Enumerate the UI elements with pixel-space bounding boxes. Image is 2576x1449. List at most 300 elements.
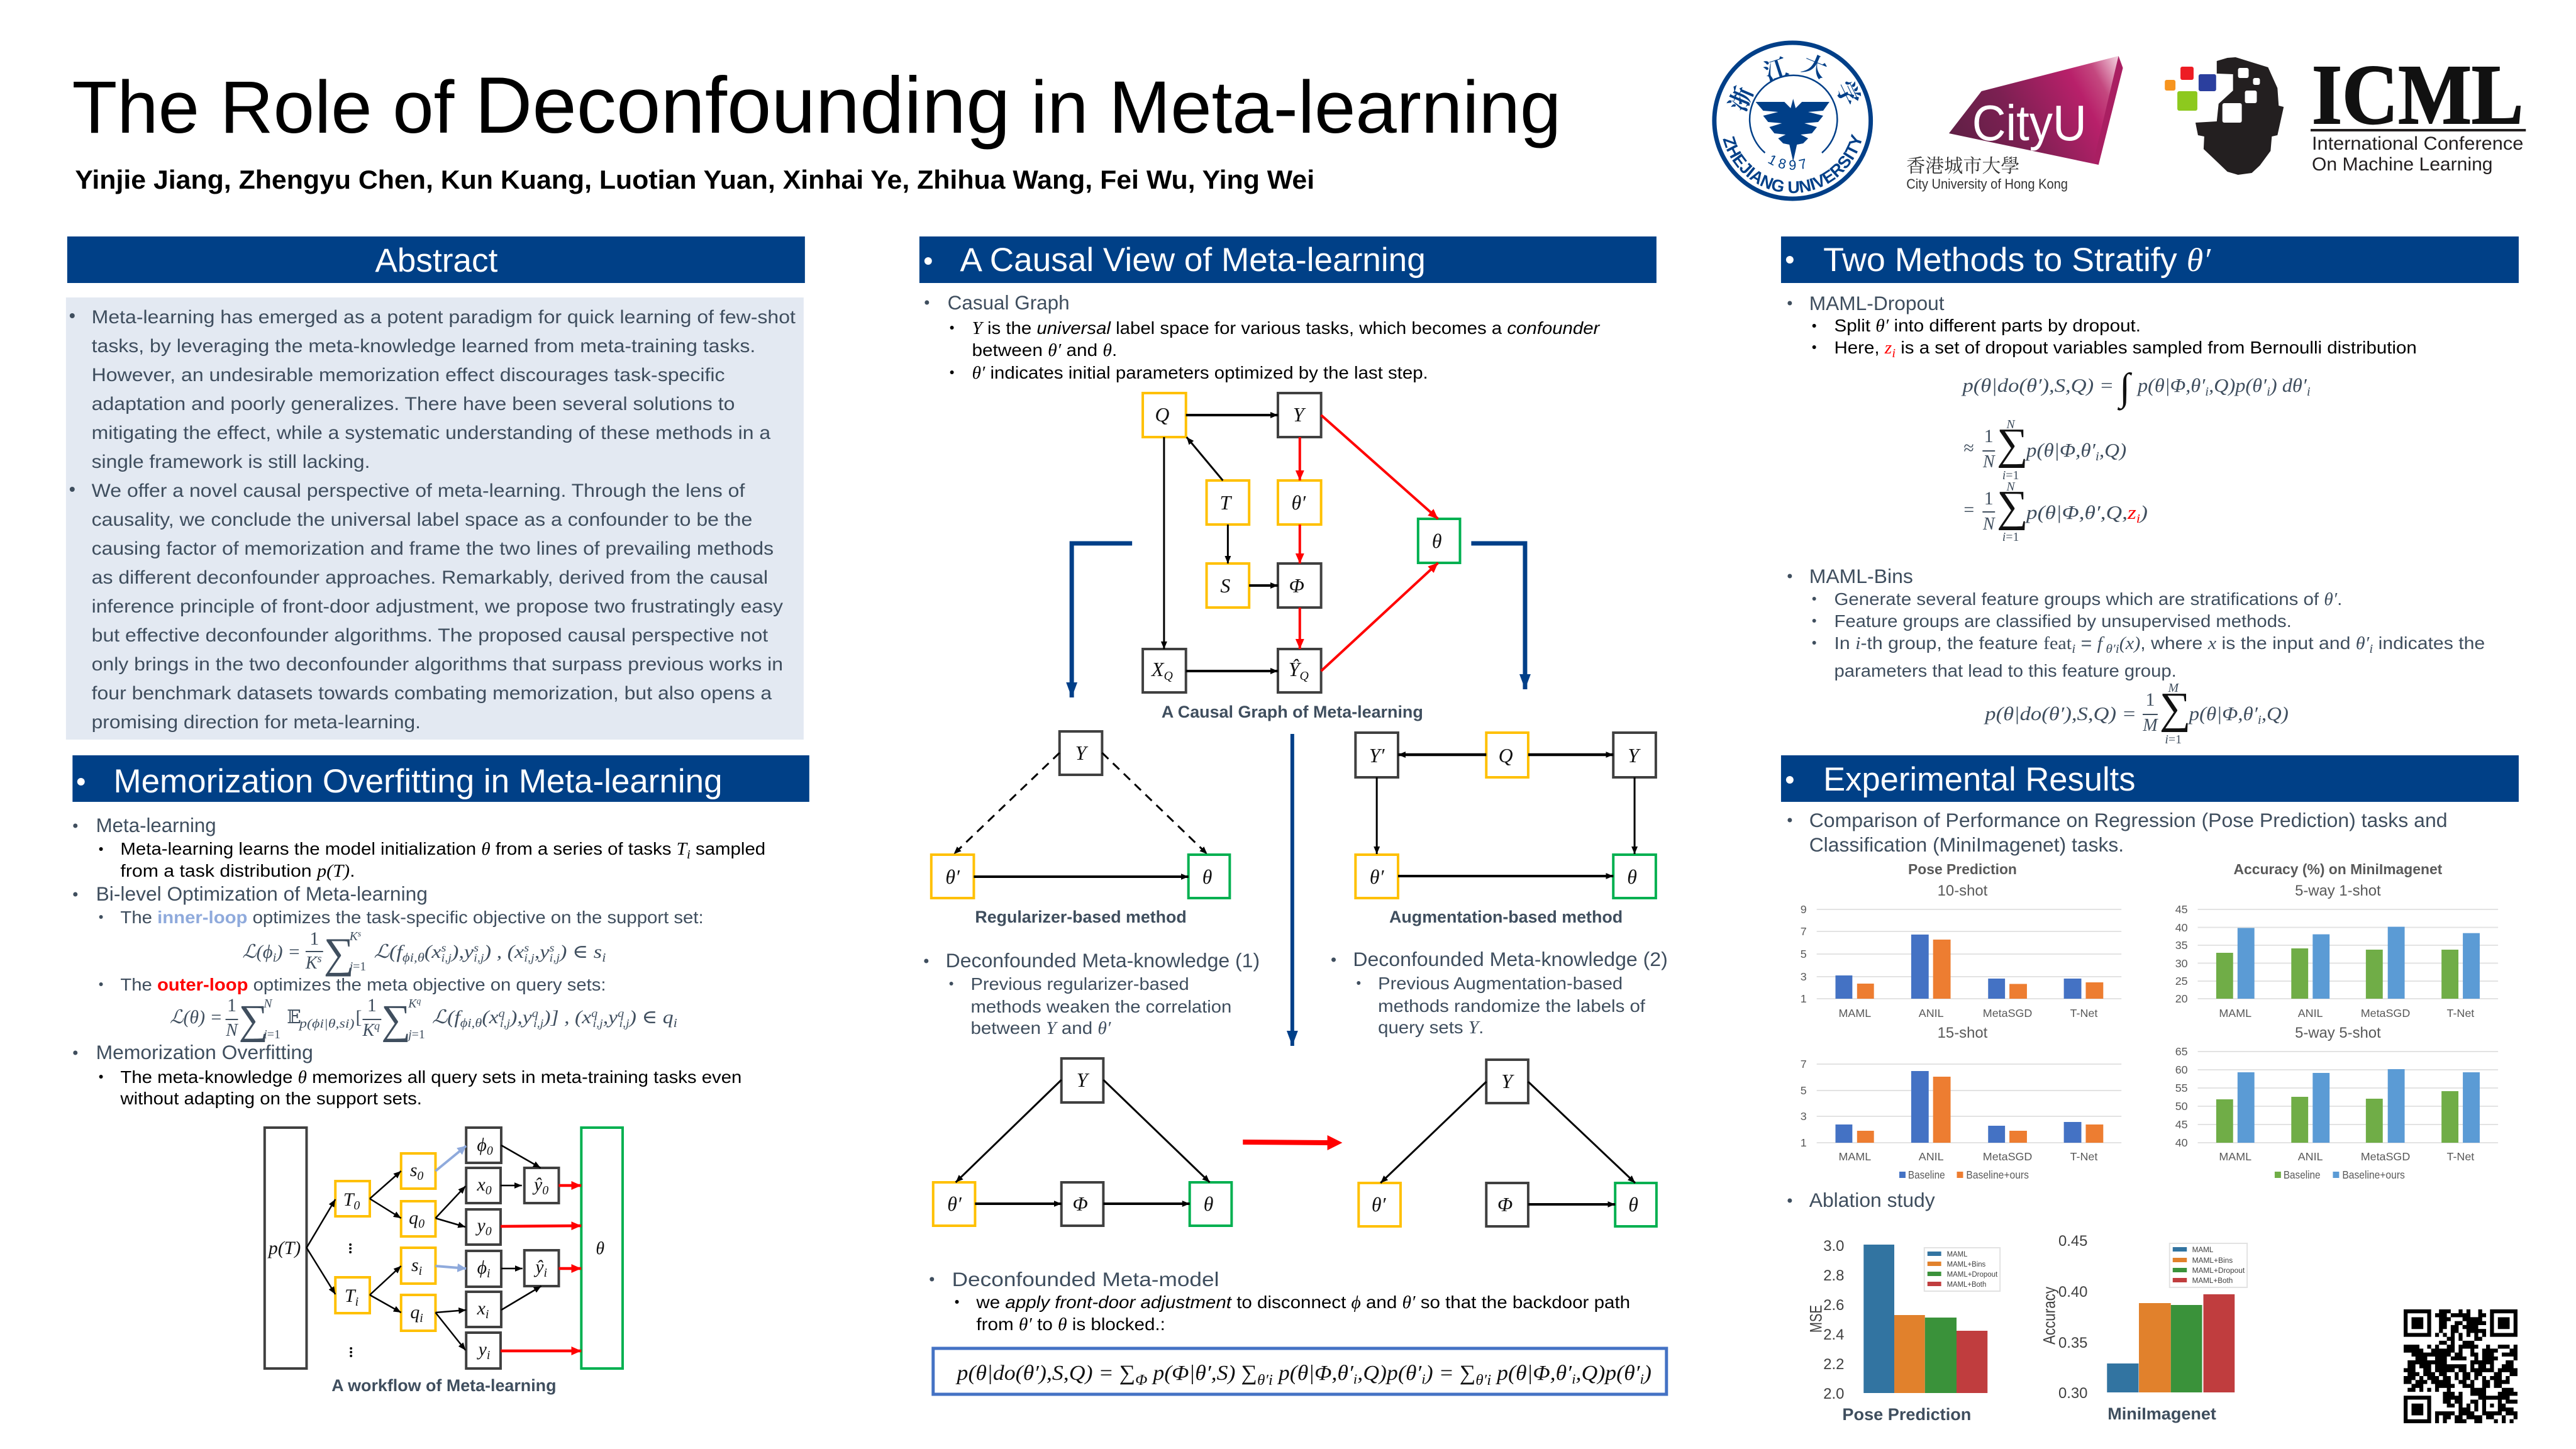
text block: MAML-Bins: = xyxy=(2075,633,2097,653)
panel: Abstract text: causing factor of memorization and frame the two lines of prevailing methods xyxy=(92,538,774,559)
box: x0: 0 xyxy=(486,1184,492,1197)
formula: inner-loop objective: i,j xyxy=(474,952,484,964)
header: poster title and authors xyxy=(72,60,1561,194)
bar chart: Pose 15-shot: MetaSGD xyxy=(1983,1150,2032,1163)
formula: inner-loop objective: s xyxy=(441,941,446,954)
text block: comparison xyxy=(1787,809,2448,856)
arrow: red transition xyxy=(1243,1135,1342,1150)
panel: Abstract text: promising direction for meta-learning. xyxy=(92,712,421,733)
text block: memorization bullets xyxy=(73,814,765,1108)
formula: outer-loop objective: N xyxy=(225,1021,238,1040)
box: si: s xyxy=(411,1255,419,1275)
formula: inner-loop objective: ,y xyxy=(535,941,550,962)
diagram: regularizer-based method xyxy=(931,731,1230,898)
bar chart: Pose 15-shot: 7 xyxy=(1801,1058,1807,1070)
formula: dropout integral: ) dθ′ xyxy=(2269,374,2307,396)
text block: deconfounded meta-knowledge 2: Deconfounded Meta-knowledge (2) xyxy=(1353,948,1668,970)
box: q0: q xyxy=(409,1208,418,1228)
formula box: front-door adjustment: Φ xyxy=(1135,1372,1147,1389)
arrows: inner-loop adaptation xyxy=(435,1146,466,1269)
bar chart: MiniImagenet 5-way 5-shot: 40 xyxy=(2175,1136,2188,1149)
caption: regularizer: Regularizer-based method xyxy=(975,908,1187,926)
formula: outer-loop objective: K xyxy=(408,997,416,1011)
formula: dropout sample: i xyxy=(2136,512,2140,526)
node: Y: Y xyxy=(1293,404,1306,426)
bar chart: Pose 10-shot: 3 xyxy=(1801,970,1807,983)
formula: dropout integral: i xyxy=(2205,385,2209,399)
icon: ellipsis dots xyxy=(349,1243,352,1357)
legend: ablation MSE: MAML+Bins xyxy=(1947,1260,1985,1269)
legend: ablation accuracy: MAML xyxy=(2192,1245,2214,1254)
legend: ablation MSE xyxy=(1924,1248,2000,1291)
formula: bins: M xyxy=(2167,681,2179,695)
text block: MAML-Bins: f xyxy=(2097,634,2105,653)
diagram: augmentation-based method: Y′ xyxy=(1369,745,1385,767)
box: xi: i xyxy=(486,1307,489,1321)
bar chart: MiniImagenet 5-way 1-shot: 45 xyxy=(2175,903,2188,916)
formula: bins: i xyxy=(2258,713,2262,727)
bar chart: MiniImagenet 5-way 5-shot: MAML xyxy=(2219,1150,2251,1163)
arrows: black causal edges xyxy=(1164,415,1278,671)
box: p(T) xyxy=(265,1128,306,1368)
formula: outer-loop objective: (x xyxy=(482,1007,499,1028)
bar chart: MiniImagenet 5-way 5-shot: ANIL xyxy=(2298,1150,2323,1163)
diagram: front-door before: θ′ xyxy=(947,1193,962,1215)
formula box: front-door adjustment: p(θ|Φ,θ′ xyxy=(1273,1362,1353,1385)
column: left xyxy=(66,236,809,1108)
logo: ICML: On Machine Learning xyxy=(2312,154,2493,175)
logo: CityU: 香港城市大學 xyxy=(1906,151,2019,178)
bar chart: MiniImagenet 5-way 1-shot: 20 xyxy=(2175,992,2188,1005)
caption: causal graph: A Causal Graph of Meta-learning xyxy=(1162,702,1423,721)
bar chart: Pose 15-shot: T-Net xyxy=(2070,1150,2097,1163)
text block: deconfounded meta-knowledge 1: between Y and θ′ xyxy=(970,1018,1111,1038)
text block: MAML-Bins: Feature groups are classified by unsupervised methods. xyxy=(1835,611,2292,631)
node: theta prime: θ′ xyxy=(1291,492,1306,514)
formula: dropout sample: p(θ|Φ,θ′,Q, z xyxy=(2026,501,2135,523)
text block: deconfounded meta-knowledge 1: Previous regularizer-based xyxy=(970,974,1189,994)
formula: dropout sample: = xyxy=(1963,499,1974,520)
panel: Causal View heading xyxy=(919,236,1657,283)
formula box: front-door adjustment: ) = ∑ xyxy=(1424,1362,1475,1385)
box: T0 xyxy=(335,1181,370,1216)
text block: MAML-Bins: , where x is the input and θ′ xyxy=(2140,633,2368,653)
text block: memorization bullets: The inner-loop optimizes the task-specific objective on the support set: xyxy=(120,908,704,927)
diagram: front-door after: θ xyxy=(1628,1194,1638,1216)
bar chart: MiniImagenet 5-way 1-shot: 35 xyxy=(2175,939,2188,952)
arrows: outer-loop to theta xyxy=(501,1185,581,1351)
text block: memorization bullets: Meta-learning xyxy=(96,814,216,836)
panel: Abstract text: but effective deconfounder algorithms. The proposed causal perspective not xyxy=(92,625,769,646)
node: Q: Q xyxy=(1155,404,1169,426)
formula: dropout approximation: ∑ xyxy=(1997,420,2028,469)
legend: accuracy charts: Baseline+ours xyxy=(2342,1169,2405,1181)
legend: ablation accuracy xyxy=(2170,1243,2247,1287)
bar chart: MiniImagenet 5-way 5-shot xyxy=(2175,1024,2498,1163)
bar chart: Pose 10-shot: MetaSGD xyxy=(1983,1007,2032,1019)
box: y0: 0 xyxy=(486,1224,492,1238)
formula: dropout sample: ∑ xyxy=(1997,482,2028,531)
bar chart: Pose 10-shot: 9 xyxy=(1801,903,1807,916)
panel: Abstract text: as different deconfounder approaches. Remarkably, derived from the causal xyxy=(92,567,768,588)
node: XQ: Q xyxy=(1163,669,1173,683)
logo: Zhejiang University seal: 浙 xyxy=(1719,80,1760,116)
box: Ti xyxy=(335,1277,370,1313)
formula: outer-loop objective: q xyxy=(499,1007,505,1019)
formula: bins: ∑ xyxy=(2160,684,2191,733)
text block: deconfounded meta-knowledge 2 xyxy=(1331,948,1668,1038)
arrow: blue elbow right xyxy=(1471,543,1525,689)
text block: casual graph bullets xyxy=(924,292,1601,383)
bar chart: MiniImagenet 5-way 5-shot: 55 xyxy=(2175,1082,2188,1094)
box: x0 xyxy=(466,1168,501,1203)
bar chart: Pose 10-shot: T-Net xyxy=(2070,1007,2097,1019)
diagram: augmentation-based method: Y xyxy=(1628,745,1641,767)
formula: outer-loop objective: K xyxy=(362,1021,374,1040)
formula: inner-loop objective: (x xyxy=(425,941,441,962)
formula: inner-loop objective: s xyxy=(524,941,529,954)
formula: dropout sample: 1 xyxy=(1984,488,1994,509)
box: phi0 xyxy=(466,1128,501,1163)
box: theta: θ xyxy=(596,1239,604,1258)
text block: casual graph bullets: Y is the universal label space for various tasks, which becomes a confounder xyxy=(972,318,1601,338)
bar chart: ablation accuracy: 0.45 xyxy=(2058,1233,2087,1250)
box: qi: q xyxy=(410,1302,419,1323)
formula: inner-loop objective: s xyxy=(474,941,479,954)
formula: outer-loop objective: i xyxy=(674,1016,677,1030)
legend: accuracy charts: Baseline xyxy=(2284,1169,2321,1181)
formula: outer-loop objective: [ xyxy=(356,1007,362,1028)
formula box: front-door adjustment: i xyxy=(1640,1371,1644,1387)
box: xi: x xyxy=(477,1298,486,1319)
panel: Abstract heading: Abstract xyxy=(375,242,498,279)
chart title: Accuracy on MiniImagenet: Accuracy (%) on MiniImagenet xyxy=(2233,861,2443,877)
bar chart: Pose 10-shot: 10-shot xyxy=(1938,882,1988,899)
text block: deconfounded meta-knowledge 1: methods weaken the correlation xyxy=(970,997,1231,1016)
logo: Zhejiang University seal: 大 xyxy=(1798,44,1833,85)
text block: deconfounded meta-model: we apply front-door adjustment to disconnect ϕ and θ′ so that the backdoor path xyxy=(975,1292,1630,1313)
logo: Zhejiang University seal: 1 8 9 7 xyxy=(1768,155,1805,170)
formula box: front-door adjustment: p(θ|do(θ′),S,Q) = ∑ xyxy=(957,1362,1125,1385)
node: XQ xyxy=(1143,649,1186,692)
node: Phi xyxy=(1278,564,1321,608)
formula: dropout integral: p(θ|Φ,θ′ xyxy=(2138,374,2202,396)
formula: dropout integral: i xyxy=(2307,385,2311,399)
text block: deconfounded meta-model xyxy=(930,1269,1630,1335)
panel: Abstract text: inference principle of front-door adjustment, we propose two frustratingly easy xyxy=(92,596,783,617)
text block: memorization bullets: i xyxy=(687,848,691,862)
formula: inner-loop objective: ),y xyxy=(450,941,474,962)
legend: ablation MSE: MAML+Dropout xyxy=(1947,1270,1998,1279)
bar chart: ablation accuracy: Accuracy xyxy=(2040,1287,2059,1345)
text block: memorization bullets: The meta-knowledge θ memorizes all query sets in meta-training tasks even xyxy=(120,1067,741,1087)
box: q0: 0 xyxy=(418,1217,425,1231)
formula: bins: p(θ|Φ,θ′ xyxy=(2189,702,2253,724)
box: yi: y xyxy=(479,1339,487,1360)
authors: Yinjie Jiang, Zhengyu Chen, Kun Kuang, Luotian Yuan, Xinhai Ye, Zhihua Wang, Fei Wu, Ying Wei xyxy=(75,165,1314,194)
diagram: augmentation-based method: θ xyxy=(1627,866,1637,888)
node: S: S xyxy=(1220,575,1230,597)
bar chart: MiniImagenet 5-way 5-shot: T-Net xyxy=(2447,1150,2474,1163)
caption: ablation miniimagenet: MiniImagenet xyxy=(2107,1404,2216,1423)
caption: workflow: A workflow of Meta-learning xyxy=(331,1376,557,1395)
formula: dropout approximation: i=1 xyxy=(2002,469,2019,482)
legend: ablation accuracy: MAML+Dropout xyxy=(2192,1266,2245,1275)
bar chart: MiniImagenet 5-way 1-shot: 30 xyxy=(2175,957,2188,970)
formula: outer-loop objective: q xyxy=(374,1019,380,1032)
bar chart: ablation accuracy: 0.35 xyxy=(2058,1335,2087,1352)
panel: Abstract text: We offer a novel causal perspective of meta-learning. Through the lens of xyxy=(92,480,745,501)
panel: Memorization Overfitting heading xyxy=(72,755,809,802)
formula: outer-loop objective xyxy=(170,995,677,1043)
formula: dropout integral: ,Q)p(θ′ xyxy=(2209,374,2267,396)
diagram: front-door after: θ′ xyxy=(1372,1194,1386,1216)
bar chart: MiniImagenet 5-way 1-shot: ANIL xyxy=(2298,1007,2323,1019)
box: phii xyxy=(466,1251,501,1287)
bar chart: ablation MSE: 2.8 xyxy=(1823,1267,1844,1284)
bar chart: Pose 10-shot: MAML xyxy=(1838,1007,1871,1019)
text block: MAML-Bins: i xyxy=(2369,642,2373,656)
bar chart: MiniImagenet 5-way 1-shot: MAML xyxy=(2219,1007,2251,1019)
formula: outer-loop objective: ℒ(θ) = xyxy=(170,1007,223,1028)
node: T xyxy=(1207,480,1249,525)
column: right xyxy=(1781,236,2519,1424)
formula: inner-loop objective xyxy=(242,928,606,977)
legend: ablation MSE: MAML xyxy=(1947,1250,1968,1258)
formula: outer-loop objective: q xyxy=(591,1007,597,1019)
bar chart: Pose 10-shot: 7 xyxy=(1801,925,1807,938)
arrow: blue elbow left xyxy=(1072,543,1132,697)
panel: Abstract text: tasks, by leveraging the meta-knowledge learned from meta-training tasks. xyxy=(92,336,755,357)
box: x0: x xyxy=(477,1174,486,1195)
panel: Experimental Results heading xyxy=(1781,755,2519,802)
panel: Memorization Overfitting heading: Memorization Overfitting in Meta-learning xyxy=(113,763,723,800)
formula: dropout approximation: p(θ|Φ,θ′ xyxy=(2026,439,2090,461)
bar chart: Pose 10-shot: ANIL xyxy=(1919,1007,1944,1019)
panel: Abstract text: mitigating the effect, while a systematic understanding of these methods in a xyxy=(92,423,771,443)
formula: bins: p(θ|do(θ′),S,Q) = xyxy=(1984,702,2136,724)
diagram: causal graph xyxy=(1143,393,1460,692)
bar chart: MiniImagenet 5-way 5-shot: 65 xyxy=(2175,1045,2188,1058)
text block: deconfounded meta-knowledge 1 xyxy=(924,950,1260,1038)
node: Phi: Φ xyxy=(1289,575,1304,597)
column: middle xyxy=(919,236,1668,1394)
bar chart: Pose 15-shot xyxy=(1801,1024,2121,1163)
diagram: front-door before: θ xyxy=(1204,1193,1213,1215)
text block: MAML-Bins: (x) xyxy=(2119,634,2140,653)
bar chart: ablation MSE: MSE xyxy=(1807,1305,1826,1333)
formula: outer-loop objective: ,y xyxy=(603,1007,618,1028)
logo: CityU: City University of Hong Kong xyxy=(1906,176,2068,192)
formula: inner-loop objective: ) ∈ s xyxy=(558,941,602,962)
text block: MAML-Dropout: is a set of dropout variables sampled from Bernoulli distribution xyxy=(1896,338,2417,357)
formula: inner-loop objective: ℒ(ϕ xyxy=(242,941,272,962)
logo: Zhejiang University seal: 学 xyxy=(1829,74,1870,111)
arrows: task sampling and support/query splits xyxy=(306,1145,541,1350)
text block: comparison: Classification (MiniImagenet) tasks. xyxy=(1809,834,2124,856)
formula: dropout approximation: N xyxy=(1982,452,1996,472)
chart title: Pose Prediction: Pose Prediction xyxy=(1908,861,2017,877)
legend: pose charts: Baseline xyxy=(1908,1169,1945,1181)
bar chart: Pose 15-shot: ANIL xyxy=(1919,1150,1944,1163)
node: XQ: X xyxy=(1152,658,1163,680)
logo: ICML xyxy=(2165,48,2526,175)
panel: Abstract text xyxy=(66,297,804,740)
diagram: front-door before: Y xyxy=(1077,1069,1090,1091)
box: T0: 0 xyxy=(353,1199,360,1213)
diagram: front-door before xyxy=(933,1058,1231,1226)
formula: outer-loop objective: q xyxy=(618,1007,624,1019)
box: s0: 0 xyxy=(417,1169,423,1183)
formula: dropout approximation: N xyxy=(2006,418,2016,431)
diagram: augmentation-based method: θ′ xyxy=(1370,866,1384,888)
text block: MAML-Bins: i xyxy=(2072,642,2075,656)
text block: memorization bullets: The outer-loop optimizes the meta objective on query sets: xyxy=(120,975,606,994)
formula box: front-door adjustment: i xyxy=(1572,1371,1576,1387)
node: YQ hat: Q xyxy=(1299,669,1309,683)
diagram: front-door after: Φ xyxy=(1497,1194,1513,1216)
QR code xyxy=(2404,1309,2518,1423)
formula: outer-loop objective: 1 xyxy=(367,995,377,1016)
text block: deconfounded meta-knowledge 2: methods randomize the labels of xyxy=(1378,996,1645,1016)
bar chart: ablation MSE: 2.6 xyxy=(1823,1297,1844,1314)
panel: Causal View heading: A Causal View of Meta-learning xyxy=(960,242,1426,279)
bar chart: ablation MSE: 2.0 xyxy=(1823,1385,1844,1402)
formula box: front-door adjustment: θ′i xyxy=(1475,1372,1491,1389)
bar chart: ablation MSE: 2.2 xyxy=(1823,1356,1844,1373)
box: phii: i xyxy=(487,1267,491,1280)
logo: CityU: CityU xyxy=(1972,95,2087,151)
logo: Zhejiang University seal: 江 xyxy=(1758,47,1792,88)
text block: deconfounded meta-knowledge 1: Deconfounded Meta-knowledge (1) xyxy=(946,950,1260,972)
bar chart: Pose 15-shot: 15-shot xyxy=(1938,1024,1988,1041)
panel: Abstract text: causality, we conclude the universal label space as a confounder to be the xyxy=(92,509,752,530)
formula: dropout sample xyxy=(1963,480,2148,544)
box: y0: y xyxy=(477,1215,486,1236)
diagram: regularizer-based method: Y xyxy=(1075,742,1089,764)
bar chart: Pose 10-shot: 1 xyxy=(1801,992,1807,1005)
text block: casual graph bullets: Casual Graph xyxy=(948,292,1070,314)
formula: outer-loop objective: i,j xyxy=(619,1017,630,1030)
formula box: front-door adjustment: p(θ|Φ,θ′ xyxy=(1491,1362,1572,1385)
formula: outer-loop objective: i=1 xyxy=(264,1028,280,1041)
legend: ablation MSE: MAML+Both xyxy=(1947,1280,1986,1289)
text block: deconfounded meta-model: Deconfounded Meta-model xyxy=(952,1269,1219,1291)
panel: Abstract text: However, an undesirable memorization effect discourages task-specific xyxy=(92,365,725,386)
box: T0: T xyxy=(343,1189,353,1210)
formula: inner-loop objective: ) , (x xyxy=(482,941,525,962)
bar chart: MiniImagenet 5-way 5-shot: 5-way 5-shot xyxy=(2295,1024,2381,1041)
text block: memorization bullets: from a task distribution p(T). xyxy=(120,861,355,881)
formula: dropout sample: ) xyxy=(2139,501,2148,523)
formula: bins: M xyxy=(2142,716,2158,735)
text block: MAML-Dropout: i xyxy=(1892,347,1896,360)
formula: outer-loop objective: p(ϕi|θ,si) xyxy=(298,1017,355,1031)
logos xyxy=(1712,40,2526,201)
text block: MAML-Bins: In i-th group, the feature feat xyxy=(1835,633,2070,653)
title: The Role of Deconfounding in Meta-learning xyxy=(72,60,1561,150)
box: yhat0: ŷ xyxy=(534,1174,542,1195)
box: q0 xyxy=(401,1201,435,1236)
bar chart: MiniImagenet 5-way 5-shot: 50 xyxy=(2175,1100,2188,1113)
formula: dropout sample: N xyxy=(2006,480,2016,494)
formula box: front-door adjustment: ) xyxy=(1643,1362,1652,1385)
diagram: front-door before: Φ xyxy=(1072,1193,1088,1215)
formula: outer-loop objective: i,j xyxy=(500,1017,510,1030)
text block: deconfounded meta-model: from θ′ to θ is blocked.: xyxy=(976,1314,1165,1335)
formula: dropout sample: N xyxy=(1982,514,1996,534)
formula: dropout approximation: ≈ xyxy=(1963,438,1974,458)
box: y0 xyxy=(466,1209,501,1245)
box: qi: i xyxy=(419,1311,423,1325)
panel: Abstract text: only brings in the two deconfounder algorithms that surpass previous works in xyxy=(92,654,783,675)
bar chart: ablation accuracy xyxy=(2040,1233,2247,1402)
caption: ablation pose: Pose Prediction xyxy=(1842,1405,1971,1424)
formula: dropout approximation: 1 xyxy=(1984,426,1994,447)
bar chart: ablation accuracy: 0.30 xyxy=(2058,1385,2087,1402)
panel: Two Methods heading xyxy=(1781,236,2519,283)
node: Y xyxy=(1278,393,1321,437)
formula: inner-loop objective: s xyxy=(549,941,554,954)
formula: inner-loop objective: K xyxy=(306,953,317,973)
box: s0: s xyxy=(410,1160,417,1180)
formula: inner-loop objective: s xyxy=(358,930,361,939)
text block: deconfounded meta-knowledge 2: query sets Y. xyxy=(1378,1018,1484,1038)
bar chart: MiniImagenet 5-way 1-shot: MetaSGD xyxy=(2361,1007,2410,1019)
bar chart: MiniImagenet 5-way 1-shot: 40 xyxy=(2175,921,2188,934)
text block: MAML-Bins xyxy=(1787,565,2485,680)
formula: inner-loop objective: i,j xyxy=(441,952,452,964)
formula: dropout integral: i xyxy=(2267,385,2270,399)
bar chart: Pose 15-shot: MAML xyxy=(1838,1150,1871,1163)
node: T: T xyxy=(1220,492,1232,514)
legend: pose charts: Baseline+ours xyxy=(1966,1169,2029,1181)
formula: dropout integral: ∫ xyxy=(2117,366,2133,411)
box: phi0: 0 xyxy=(487,1144,493,1158)
bar chart: Pose 15-shot: 3 xyxy=(1801,1110,1807,1123)
text block: MAML-Bins: θ′i xyxy=(2102,642,2119,656)
panel: Abstract text: Meta-learning has emerged as a potent paradigm for quick learning of few-shot xyxy=(92,307,796,328)
text block: memorization bullets: without adapting on the support sets. xyxy=(119,1089,422,1108)
logo: Zhejiang University seal: ZHEJIANG UNIVERSITY xyxy=(1723,133,1862,194)
formula: dropout sample: i=1 xyxy=(2002,530,2019,544)
node: theta xyxy=(1418,519,1460,563)
text block: MAML-Bins: MAML-Bins xyxy=(1809,565,1913,587)
panel: Abstract text: four benchmark datasets towards combating memorization, but also opens a xyxy=(92,683,772,704)
node: Q xyxy=(1143,393,1186,437)
diagram: augmentation-based method xyxy=(1355,733,1656,898)
formula: inner-loop objective: ∑ xyxy=(324,930,354,977)
formula: inner-loop objective: ℒ(f xyxy=(374,941,399,962)
box: phi0: ϕ xyxy=(477,1135,487,1155)
text block: deconfounded meta-knowledge 2: Previous Augmentation-based xyxy=(1378,974,1623,993)
node: YQ hat xyxy=(1278,649,1321,692)
text block: casual graph bullets: θ′ indicates initial parameters optimized by the last step. xyxy=(972,363,1428,383)
arrow: blue centre down xyxy=(1291,734,1294,1046)
box: Ti: i xyxy=(355,1295,358,1309)
formula box: front-door adjustment: θ′i xyxy=(1257,1372,1273,1389)
box: yi: i xyxy=(487,1348,490,1362)
panel: Abstract heading xyxy=(67,236,805,283)
formula: outer-loop objective: i,j xyxy=(533,1017,543,1030)
bar chart: MiniImagenet 5-way 1-shot: T-Net xyxy=(2447,1007,2474,1019)
text block: memorization bullets: sampled xyxy=(691,839,765,858)
formula: dropout integral: p(θ|do(θ′),S,Q) = xyxy=(1961,374,2114,396)
formula: dropout approximation: i xyxy=(2096,450,2099,464)
formula box: front-door adjustment: i xyxy=(1353,1371,1357,1387)
box: yi xyxy=(466,1333,501,1368)
bar chart: MiniImagenet 5-way 5-shot: MetaSGD xyxy=(2361,1150,2410,1163)
